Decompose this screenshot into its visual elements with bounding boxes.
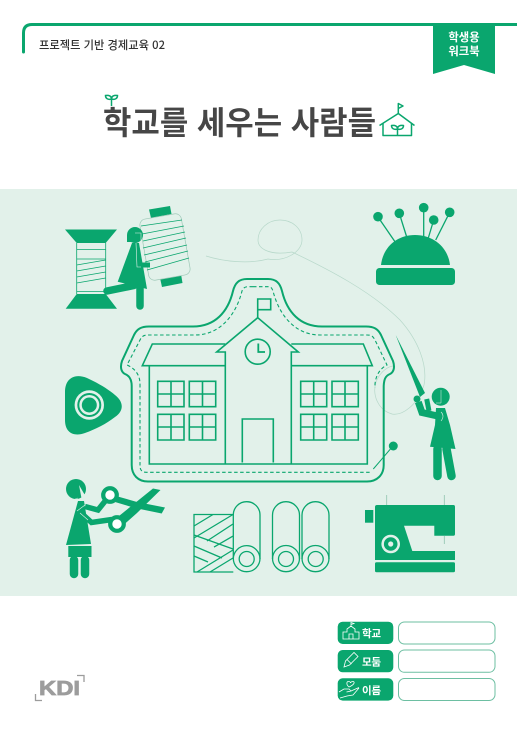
fabric school patch outline [121,279,394,482]
form row: group [338,650,495,672]
roll three [302,502,329,572]
thread path [206,220,425,414]
logo: KDI [36,676,84,700]
windows [158,381,358,440]
series label: 프로젝트 기반 경제교육 02 [39,37,165,53]
icon: hand with heart [339,682,359,698]
door [242,419,273,462]
ribbon: student workbook [433,24,495,74]
form row: name [338,678,495,701]
walls [149,366,367,464]
ribbon: student workbook: 워크북 [448,43,480,59]
icon: school [343,622,359,639]
roof left wing [142,344,225,366]
icon: sewing machine [365,495,455,572]
figure: person with scissors [59,479,112,574]
icon: pin cushion [373,203,455,285]
header bracket line [24,24,517,52]
icon: fabric rolls [194,502,329,572]
icon: large spool carried [139,206,191,287]
icon: pencil [344,652,358,667]
fabric sheet [194,514,233,572]
icon: thread spool [65,230,117,309]
clock [245,339,270,364]
form row: group: 모둠 [362,654,381,670]
form row: name: 이름 [362,683,381,698]
icon: house with flag and sprout [380,104,414,136]
title: 학교를 세우는 사람들 [103,98,376,144]
icon: chalk triangle [65,376,122,434]
icon: sprout on title [106,95,118,106]
figure: woman with spool [107,227,150,306]
form row: school [338,622,495,644]
school building [142,299,372,464]
form row: school: 학교 [362,626,381,641]
roll two [272,502,300,572]
icon: scissors [103,488,165,531]
icon: straight pin [373,442,398,469]
flag [258,299,271,318]
ribbon: student workbook: 학생용 [448,29,480,45]
roll one [233,502,260,572]
logo: KDI: KDI [39,677,80,700]
panel: illustration background [0,189,517,596]
roof right wing [291,344,372,366]
central tower [217,318,298,464]
figure: person with needle [396,335,456,476]
